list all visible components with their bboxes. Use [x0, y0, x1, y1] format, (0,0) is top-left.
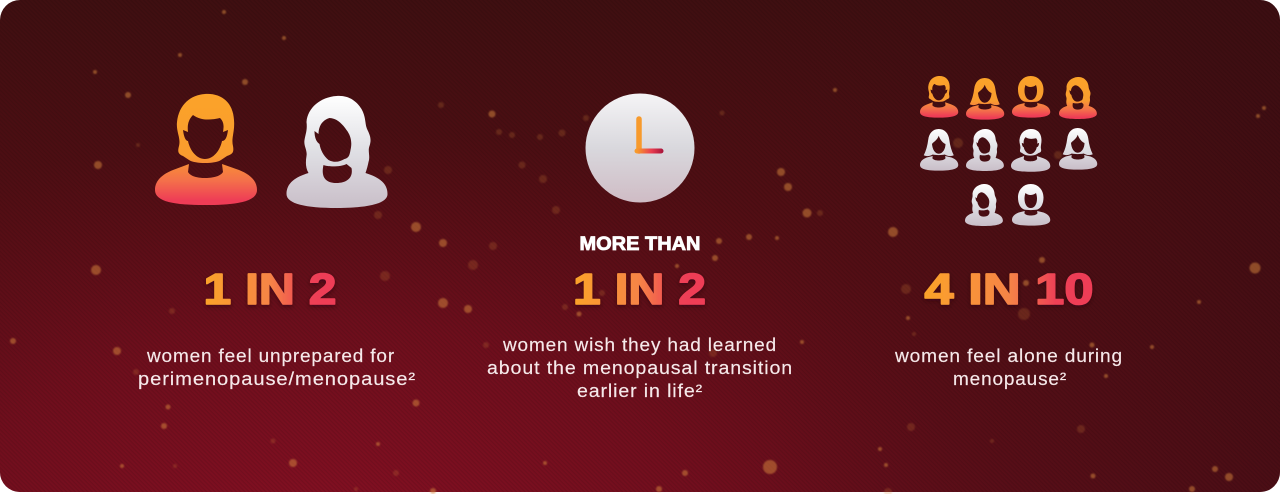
description text: menopause²: [953, 369, 1067, 389]
description text: [487, 335, 793, 401]
description text: [894, 346, 1123, 389]
icon: white women row three: [965, 184, 1050, 226]
statistic: 1 in 2: 1 IN 2: [573, 265, 706, 314]
description text: [138, 346, 416, 389]
icon: white women row two: [920, 128, 1097, 172]
description text: women feel unprepared for: [146, 346, 395, 366]
statistic: 1 in 2: 1 IN 2: [204, 265, 336, 314]
statistic: 4 in 10: 4 IN 10: [924, 265, 1094, 314]
icon: woman orange: [155, 94, 257, 205]
description text: women feel alone during: [894, 346, 1123, 366]
icon group: ten women: [920, 76, 1097, 226]
icon: orange women row: [920, 76, 1097, 120]
stat column 1: 1 in 2 unprepared: [138, 94, 416, 389]
icon: woman white: [286, 96, 388, 208]
description text: earlier in life²: [577, 381, 703, 401]
stat column 2: more than 1 in 2: [487, 94, 793, 401]
label: more than: MORE THAN: [580, 234, 700, 255]
icon: pair of women: [155, 94, 388, 208]
description text: about the menopausal transition: [487, 358, 793, 378]
icon: clock: [586, 94, 694, 202]
stat column 3: 4 in 10: [894, 76, 1123, 389]
description text: perimenopause/menopause²: [138, 369, 416, 389]
description text: women wish they had learned: [502, 335, 777, 355]
